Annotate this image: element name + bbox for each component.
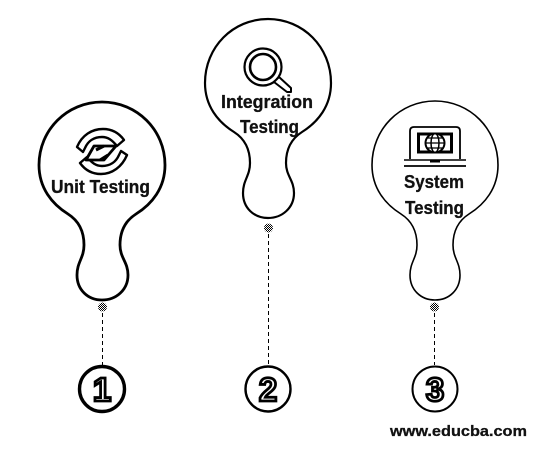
label: testing: Testing (240, 116, 299, 137)
number badge 1: 1 (93, 371, 111, 408)
bulb outline 2 (205, 19, 331, 218)
label: system: System (404, 171, 464, 192)
connector dot 2 (264, 224, 273, 232)
dashed connector 2 (268, 234, 270, 365)
connector dot 3 (430, 302, 439, 312)
item 3: system testing (372, 101, 498, 412)
icon: sync arrows (77, 129, 127, 174)
website credit: www.educba.com (389, 423, 527, 440)
item 2: integration testing (205, 19, 331, 412)
bulb outline 3 (372, 101, 498, 300)
label: unit testing: Unit Testing (51, 176, 150, 197)
number badge 3: 3 (426, 371, 444, 408)
number badge 1 (80, 366, 124, 412)
label: testing: Testing (405, 197, 464, 218)
bulb outline 1 (39, 102, 165, 300)
connector dot 1 (98, 302, 107, 312)
dashed connector 3 (434, 313, 436, 365)
number badge 2 (246, 366, 290, 412)
item 1: unit testing (39, 102, 165, 412)
number badge 3 (412, 366, 458, 412)
icon: laptop with globe (404, 127, 466, 166)
icon: magnifying glass (244, 48, 291, 92)
dashed connector 1 (102, 313, 104, 365)
number badge 2: 2 (259, 371, 277, 408)
label: integration: Integration (221, 91, 313, 112)
